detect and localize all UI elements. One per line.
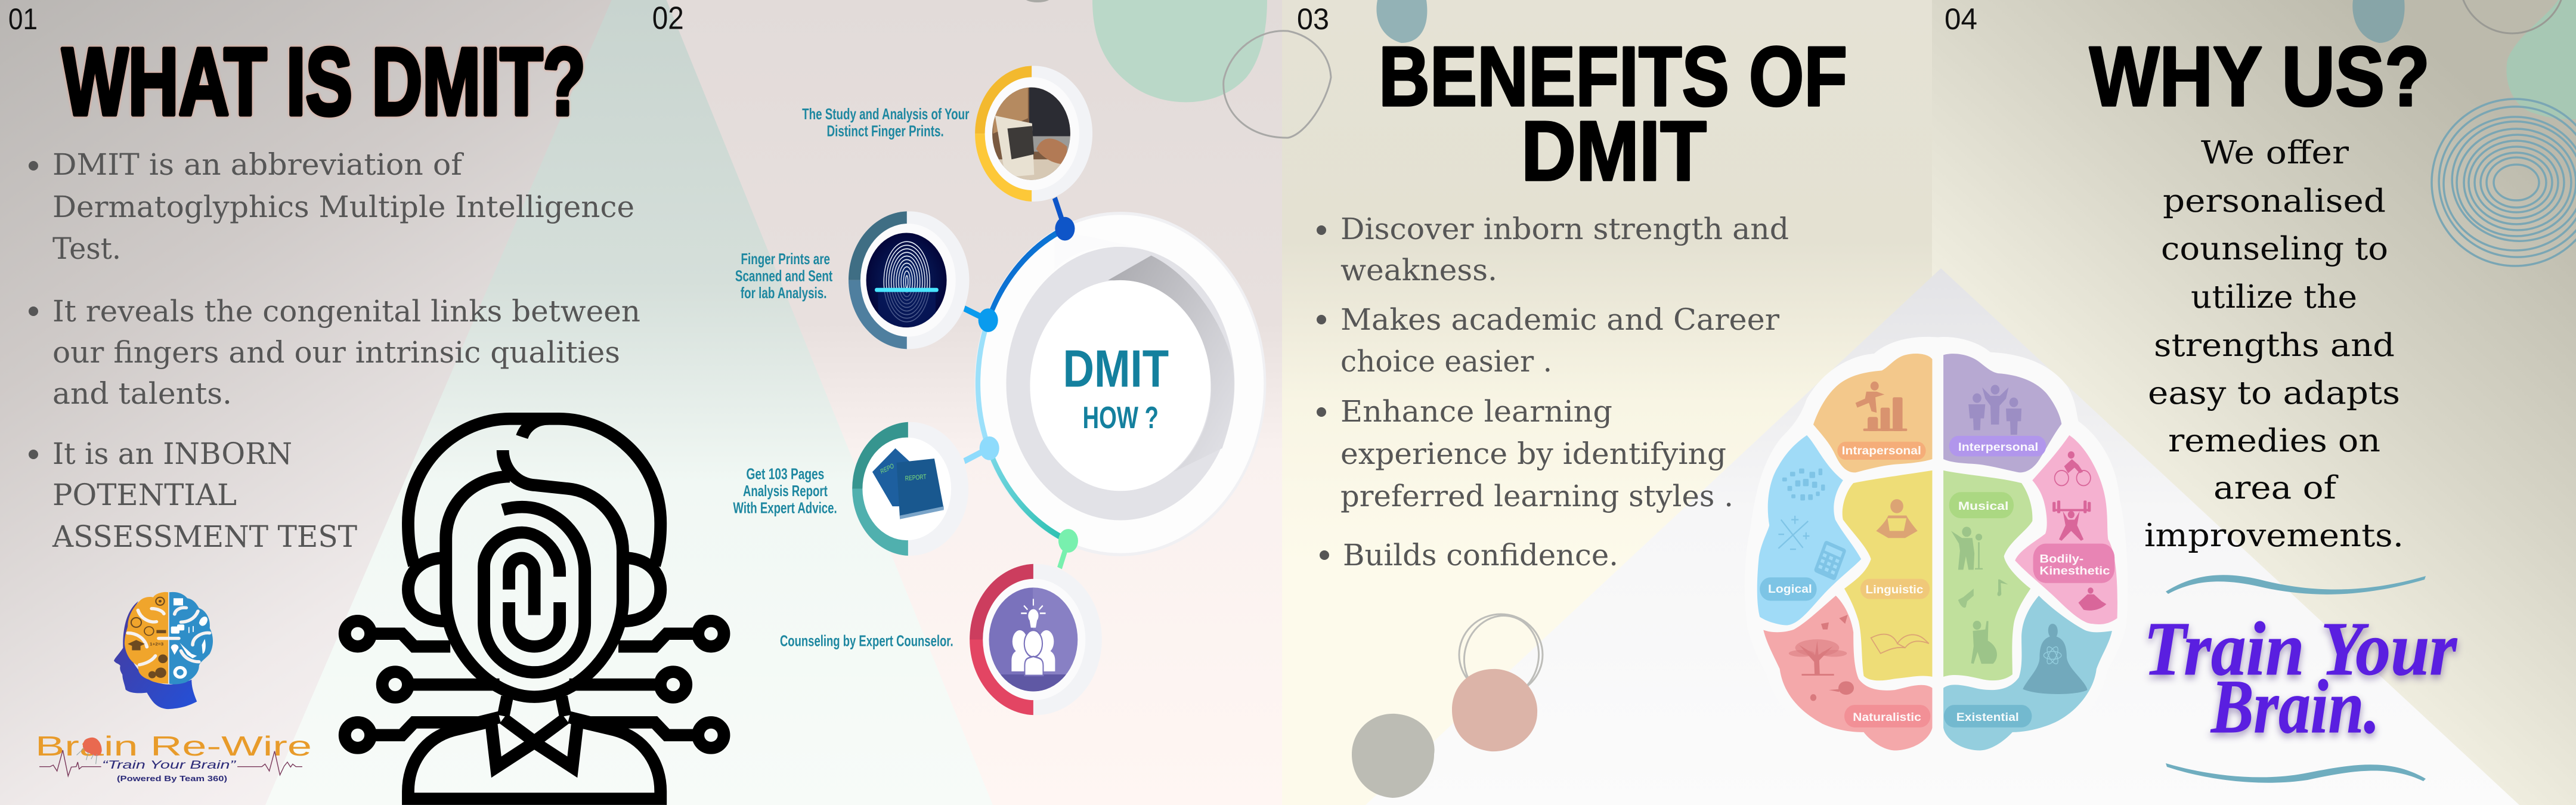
bullet list: Builds confidence. bbox=[1343, 538, 1618, 572]
step 3 text bbox=[733, 465, 837, 516]
body text: counseling to bbox=[2161, 231, 2388, 267]
title: why us: WHY US? bbox=[2089, 29, 2430, 124]
body text: strengths and bbox=[2154, 327, 2395, 364]
ECG lines bbox=[39, 750, 302, 776]
center label: DMIT bbox=[1063, 339, 1169, 398]
number 03: 03 bbox=[1297, 2, 1329, 36]
panel 2: DMIT how bbox=[652, 1, 1265, 715]
lobe: interpersonal bbox=[1943, 354, 2061, 472]
decorative blobs and rings top right of panel 2 bbox=[1092, 0, 1331, 138]
main ring bbox=[964, 198, 1265, 568]
slogan: train your brain bbox=[2144, 606, 2457, 749]
bullet list: DMIT is an abbreviation of bbox=[52, 147, 465, 182]
connector nodes bbox=[964, 198, 1078, 568]
lobe: linguistic: Linguistic bbox=[1866, 584, 1924, 596]
lobe: logical: Logical bbox=[1768, 583, 1812, 596]
step 4 text: Counseling by Expert Counselor. bbox=[780, 632, 953, 649]
lobe: existential bbox=[1943, 596, 2112, 751]
lobe: bodily-kinesthetic: Kinesthetic bbox=[2039, 565, 2110, 578]
step 2 text: Scanned and Sent bbox=[735, 267, 832, 284]
bullet list: Dermatoglyphics Multiple Intelligence bbox=[52, 190, 634, 224]
bullet list: ASSESSMENT TEST bbox=[52, 519, 357, 554]
lobe: naturalistic: Naturalistic bbox=[1853, 711, 1921, 724]
logo wordmark: Brain Re-Wire bbox=[35, 730, 312, 761]
icon: fingerprint man with circuit wires bbox=[345, 419, 724, 799]
lobe: bodily-kinesthetic: Bodily- bbox=[2039, 553, 2083, 565]
bullet list: preferred learning styles . bbox=[1340, 479, 1733, 513]
step 3 text: Get 103 Pages bbox=[746, 465, 824, 482]
title: benefits of DMIT: BENEFITS OF bbox=[1379, 29, 1847, 124]
step 2 icon: fingerprint scan bbox=[849, 211, 969, 349]
blobs and rings top right bbox=[2352, 0, 2576, 119]
bullet list: our fingers and our intrinsic qualities bbox=[52, 335, 620, 370]
lobe: intrapersonal bbox=[1813, 354, 1932, 472]
step 1 text: Distinct Finger Prints. bbox=[826, 122, 944, 140]
number 01: 01 bbox=[8, 2, 38, 36]
decorative circles bottom bbox=[1352, 607, 1548, 798]
tagline: “Train Your Brain” bbox=[102, 759, 237, 772]
bullet list: Test. bbox=[52, 231, 121, 266]
title: benefits of DMIT bbox=[1379, 29, 1847, 199]
step 1 text bbox=[802, 106, 969, 140]
slogan: train your brain: Train Your bbox=[2144, 606, 2457, 691]
number 04: 04 bbox=[1945, 2, 1977, 36]
step 3 icon: report books bbox=[852, 422, 968, 556]
bullet list: and talents. bbox=[52, 376, 232, 411]
icon: blue spiral bbox=[2419, 86, 2576, 279]
bullet list: Makes academic and Career bbox=[1340, 302, 1779, 337]
bullet list: weakness. bbox=[1340, 253, 1497, 287]
bullet list bbox=[1317, 212, 1789, 572]
title: what is DMIT: WHAT IS DMIT? bbox=[62, 28, 586, 135]
step 4 icon: counseling group bbox=[970, 564, 1102, 715]
slogan: train your brain: Brain. bbox=[2210, 664, 2380, 749]
bullet list bbox=[29, 147, 640, 554]
step 2 text bbox=[735, 250, 832, 302]
panel 3: benefits of DMIT bbox=[1297, 0, 1847, 798]
powered by: (Powered By Team 360) bbox=[117, 774, 227, 783]
step 3 icon: report books: REPO bbox=[880, 463, 895, 476]
step 1 icon: photo circle bbox=[975, 66, 1092, 202]
bullet list: Enhance learning bbox=[1340, 394, 1612, 429]
step 2 text: Finger Prints are bbox=[741, 250, 830, 268]
bullet list: choice easier . bbox=[1340, 344, 1552, 379]
body text: utilize the bbox=[2191, 279, 2357, 315]
body text: easy to adapts bbox=[2148, 375, 2400, 411]
bullet list: Discover inborn strength and bbox=[1340, 212, 1789, 246]
step 3 text: Analysis Report bbox=[743, 482, 828, 499]
lobe: existential: Existential bbox=[1956, 711, 2019, 724]
lobe: naturalistic bbox=[1763, 596, 1932, 751]
lobe: bodily-kinesthetic bbox=[2015, 435, 2117, 624]
step 3 icon: report books: REPORT bbox=[905, 473, 927, 482]
step 3 text: With Expert Advice. bbox=[733, 499, 837, 516]
lobe: musical bbox=[1943, 470, 2032, 680]
bullet list: It is an INBORN bbox=[52, 436, 292, 471]
bullet list: experience by identifying bbox=[1340, 436, 1726, 471]
center label bbox=[1063, 339, 1169, 435]
lobe: interpersonal: Interpersonal bbox=[1958, 441, 2038, 454]
timeline arcs bbox=[978, 229, 1068, 541]
number 02: 02 bbox=[652, 1, 684, 36]
bullet list: POTENTIAL bbox=[52, 478, 237, 512]
step 1 text: The Study and Analysis of Your bbox=[802, 106, 969, 123]
body text: remedies on bbox=[2168, 423, 2380, 459]
body text: area of bbox=[2213, 470, 2339, 506]
body text bbox=[2144, 135, 2404, 554]
wave divider bottom bbox=[2166, 763, 2426, 783]
logo: Brain Re-Wire bbox=[35, 592, 312, 783]
lobe: logical bbox=[1757, 435, 1861, 626]
body text: personalised bbox=[2163, 183, 2386, 219]
lobe: intrapersonal: Intrapersonal bbox=[1842, 444, 1921, 457]
title: benefits of DMIT: DMIT bbox=[1521, 104, 1707, 199]
icon: head with brain: 1+2=3 bbox=[150, 642, 164, 646]
body text: improvements. bbox=[2144, 518, 2404, 554]
step 2 text: for lab Analysis. bbox=[741, 284, 826, 302]
bullet list: It reveals the congenital links between bbox=[52, 294, 640, 329]
chart: multiple intelligences brain bbox=[1745, 337, 2128, 761]
icon: small red brain bbox=[77, 738, 102, 764]
blob: teal top bbox=[1376, 0, 1427, 43]
center label: HOW ? bbox=[1083, 401, 1159, 435]
lobe: linguistic bbox=[1843, 470, 1932, 680]
panel 4: why us bbox=[1945, 0, 2576, 783]
body text: We offer bbox=[2201, 135, 2349, 171]
icon: head with brain bbox=[114, 592, 213, 709]
lobe: musical: Musical bbox=[1958, 500, 2008, 513]
wave divider top bbox=[2166, 575, 2426, 595]
panel 1: what is DMIT bbox=[8, 2, 640, 783]
